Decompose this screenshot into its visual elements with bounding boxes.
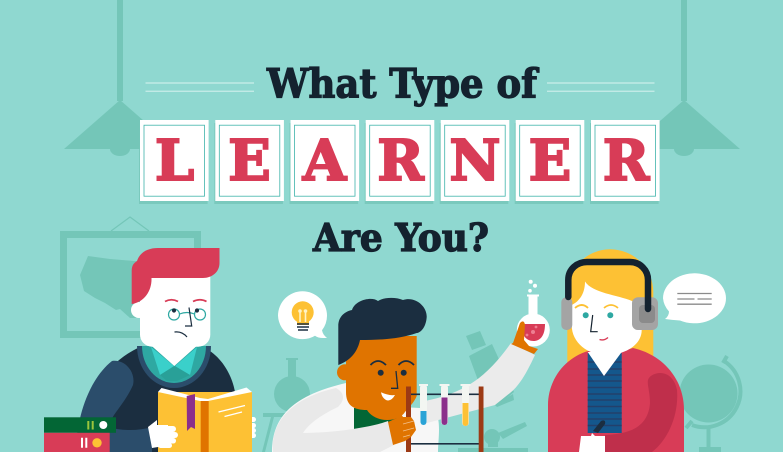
title tiles: LEARNER [139,120,660,204]
tile A [290,120,359,204]
character: reading learner [44,248,256,452]
hand on rack [388,411,416,445]
test tube: yellow [460,384,470,426]
glasses [168,309,206,320]
arm [605,373,677,452]
tile L [139,120,209,204]
face [131,270,210,366]
tile E [214,120,284,204]
tile N [440,120,509,204]
smile [381,392,395,400]
shirt [354,408,402,432]
tile R: R [377,128,424,194]
raised arm [425,343,535,423]
background: framed map [64,217,198,334]
tile L: L [155,128,194,194]
tile A: A [302,128,348,194]
tile E: E [529,128,571,194]
heading: Are You?: Are You? [312,215,489,260]
nose [391,371,398,388]
striped top [588,353,622,433]
hair [132,248,220,304]
background: lab flask [262,358,310,452]
sweater [75,347,236,452]
tile N: N [449,128,501,194]
test tube rack [406,384,484,452]
background: globe [680,356,740,452]
character: listening learner [548,249,684,452]
test tube: purple [440,384,450,425]
tile R: R [603,128,650,194]
raised hand [511,321,538,354]
background: left lamp [64,0,176,156]
character: experimenting learner [272,280,550,452]
hair [338,298,427,365]
tile R [365,120,434,204]
brows [370,361,414,365]
flask [517,280,550,346]
tile E [515,120,584,204]
background: microscope [458,331,528,452]
tile E: E [228,128,271,194]
pen [593,420,605,433]
lightbulb speech bubble [278,291,327,339]
face [346,336,417,420]
left arm [76,361,152,452]
nose [591,315,598,332]
eyes [378,370,407,376]
brows [165,300,206,302]
hand on book [148,420,178,448]
decorative title rules, right [547,82,654,92]
right fingers [248,417,256,438]
collar [137,346,211,388]
speech bubble with text lines [663,273,726,323]
decorative title rules, left [146,82,254,92]
eyes [583,312,613,318]
headphones [561,262,658,330]
stacked books [44,417,116,452]
eyes nose mouth [172,308,198,337]
background: right lamp [628,0,740,156]
sweater [548,348,684,452]
open book [158,388,252,452]
ear [337,364,353,380]
mouth [600,338,608,340]
hand [579,433,605,452]
tile R [590,120,660,204]
heading: What Type of: What Type of [266,60,540,108]
hair [567,249,653,365]
face [572,282,642,355]
coat body [272,383,439,452]
brows [575,305,618,308]
test tube: blue [419,384,428,425]
upper arm and forearm [273,388,394,452]
